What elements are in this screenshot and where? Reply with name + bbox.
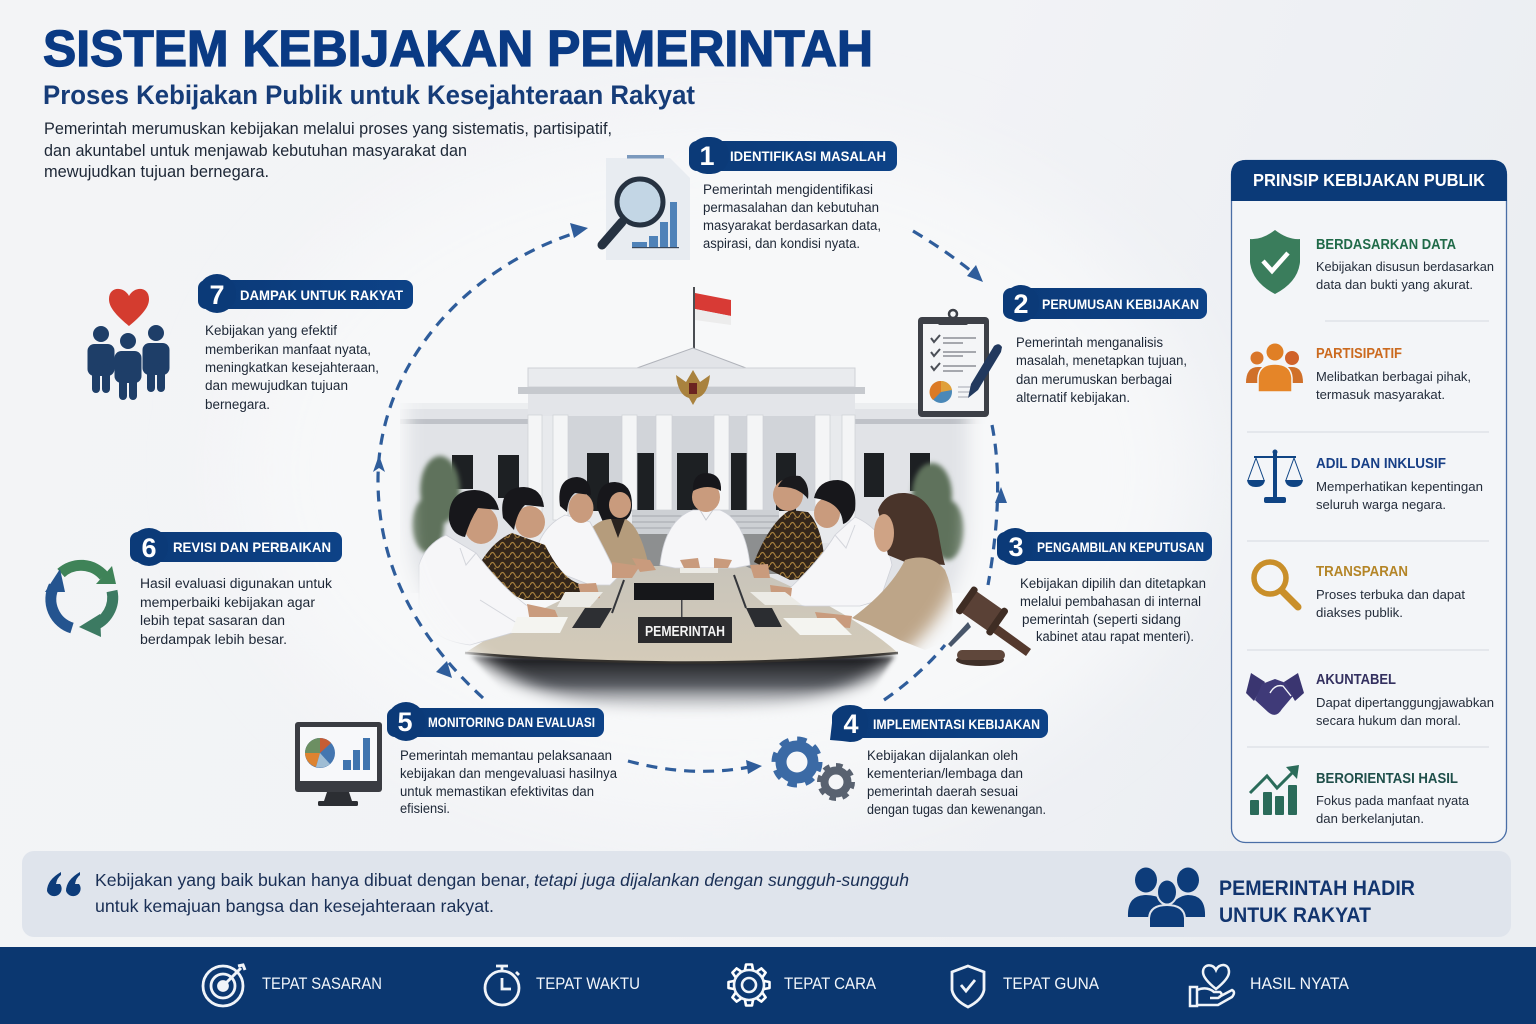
badge: step 3 <box>997 528 1212 565</box>
footer item: tepat guna: TEPAT GUNA <box>1003 974 1100 993</box>
name plate <box>638 617 732 643</box>
emblem: garuda <box>676 370 710 405</box>
badge: step 4: 4 <box>843 709 859 739</box>
person: man centre <box>660 473 750 568</box>
text: step 2: Pemerintah menganalisis <box>1016 335 1163 350</box>
arrow: 4 to 3 <box>884 645 945 700</box>
icon: government people <box>1128 868 1205 928</box>
principle: transparan <box>1254 562 1465 620</box>
quote band <box>22 851 1511 937</box>
arrow: 5 to 4 <box>628 760 762 774</box>
text: step 1: aspirasi, dan kondisi nyata. <box>703 236 860 251</box>
slogan <box>1219 877 1415 927</box>
icon: gear <box>728 964 770 1006</box>
badge: step 3: PENGAMBILAN KEPUTUSAN <box>1037 539 1204 555</box>
icon: handshake <box>1246 673 1304 715</box>
icon: orange people <box>1246 344 1303 392</box>
text: step 7: meningkatkan kesejahteraan, <box>205 360 379 375</box>
principle: berdasarkan data: BERDASARKAN DATA <box>1316 237 1456 253</box>
icon: people with heart <box>88 289 170 400</box>
icon: clipboard with pen <box>918 310 1002 417</box>
icon: shield check <box>952 966 984 1007</box>
icon: target <box>203 965 245 1006</box>
principle: partisipatif: PARTISIPATIF <box>1316 346 1402 362</box>
intro text: dan akuntabel untuk menjawab kebutuhan masyarakat dan <box>44 142 467 160</box>
badge: step 2: 2 <box>1013 289 1029 319</box>
text: step 5: untuk memastikan efektivitas dan <box>400 784 594 799</box>
principle: berorientasi hasil <box>1250 765 1470 826</box>
text: step 1: permasalahan dan kebutuhan <box>703 200 879 215</box>
text: step 5: efisiensi. <box>400 801 450 816</box>
people <box>419 473 953 650</box>
text: step 1: masyarakat berdasarkan data, <box>703 218 881 233</box>
text: step 4: kementerian/lembaga dan <box>867 766 1023 781</box>
slogan: UNTUK RAKYAT <box>1219 904 1371 927</box>
icon: stopwatch <box>485 966 519 1005</box>
principle: berorientasi hasil: dan berkelanjutan. <box>1316 811 1424 826</box>
text: step 2: masalah, menetapkan tujuan, <box>1016 353 1187 368</box>
intro text: Pemerintah merumuskan kebijakan melalui proses yang sistematis, partisipatif, <box>44 120 612 138</box>
badge: step 1: IDENTIFIKASI MASALAH <box>730 148 886 164</box>
text: step 6: berdampak lebih besar. <box>140 632 287 647</box>
table <box>465 566 898 721</box>
text: step 1: Pemerintah mengidentifikasi <box>703 182 873 197</box>
footer item: tepat guna <box>952 966 1100 1007</box>
slogan: PEMERINTAH HADIR <box>1219 877 1415 900</box>
principle: akuntabel: AKUNTABEL <box>1316 672 1396 688</box>
icon: document with magnifier <box>602 155 690 260</box>
text: step 6: lebih tepat sasaran dan <box>140 613 285 628</box>
badge: step 1: 1 <box>699 141 715 171</box>
icon: quotation mark <box>47 872 81 896</box>
text: step 7: bernegara. <box>205 397 270 412</box>
quote text: untuk kemajuan bangsa dan kesejahteraan rakyat. <box>95 896 494 916</box>
icon: gears <box>774 740 852 798</box>
arrow: 3 to 2 <box>988 425 1007 585</box>
laptops and papers <box>511 568 852 635</box>
text: step 2 <box>1016 335 1187 405</box>
icon: growth chart <box>1250 765 1299 815</box>
principle: akuntabel <box>1246 672 1494 728</box>
principle: akuntabel: secara hukum dan moral. <box>1316 713 1461 728</box>
badge: step 1 <box>689 137 897 174</box>
badge: step 5: MONITORING DAN EVALUASI <box>428 714 595 730</box>
principle: akuntabel: Dapat dipertanggungjawabkan <box>1316 695 1494 710</box>
intro text <box>44 120 612 181</box>
text: step 4: Kebijakan dijalankan oleh <box>867 748 1018 763</box>
step 4 <box>774 705 1048 817</box>
text: step 2: alternatif kebijakan. <box>1016 390 1130 405</box>
principle: adil dan inklusif: Memperhatikan kepentingan <box>1316 479 1483 494</box>
text: step 2: dan merumuskan berbagai <box>1016 372 1172 387</box>
person: batik man left <box>482 487 600 605</box>
step 3 <box>948 528 1212 666</box>
step 5 <box>295 702 617 816</box>
palace building <box>400 348 990 593</box>
name plate: PEMERINTAH <box>645 624 725 640</box>
principle: berdasarkan data <box>1250 230 1494 294</box>
icon: scales <box>1247 450 1303 503</box>
quote text: Kebijakan yang baik bukan hanya dibuat dengan benar, <box>95 870 530 890</box>
subtitle: Proses Kebijakan Publik untuk Kesejahteraan Rakyat <box>43 80 695 110</box>
badge: step 7: 7 <box>209 280 225 310</box>
principle: partisipatif <box>1246 344 1471 402</box>
badge: step 6: 6 <box>141 533 157 563</box>
text: step 7: Kebijakan yang efektif <box>205 323 337 338</box>
principle: partisipatif: termasuk masyarakat. <box>1316 387 1445 402</box>
principle: transparan: Proses terbuka dan dapat <box>1316 587 1465 602</box>
text: step 4: dengan tugas dan kewenangan. <box>867 802 1046 817</box>
flag <box>693 287 731 351</box>
panel heading <box>1231 160 1507 201</box>
footer item: hasil nyata <box>1190 965 1350 1006</box>
person: batik man right <box>750 476 825 580</box>
icon: gavel <box>948 585 1031 666</box>
footer item: tepat waktu <box>485 966 640 1005</box>
text: step 7: dan mewujudkan tujuan <box>205 378 348 393</box>
badge: step 7: DAMPAK UNTUK RAKYAT <box>240 287 403 303</box>
text: step 3: pemerintah (seperti sidang <box>1022 612 1181 627</box>
person: man front left <box>419 490 560 645</box>
principle: adil dan inklusif: ADIL DAN INKLUSIF <box>1316 456 1446 472</box>
principle: partisipatif: Melibatkan berbagai pihak, <box>1316 369 1471 384</box>
text: step 5: Pemerintah memantau pelaksanaan <box>400 748 612 763</box>
principle: adil dan inklusif <box>1247 450 1483 512</box>
panel heading: PRINSIP KEBIJAKAN PUBLIK <box>1253 170 1485 190</box>
principle: berorientasi hasil: Fokus pada manfaat nyata <box>1316 793 1470 808</box>
arrow: 6 ring back to 1 <box>373 223 588 698</box>
badge: step 5 <box>387 702 604 741</box>
text: step 5 <box>400 748 617 816</box>
icon: heart in hand <box>1190 965 1234 1006</box>
text: step 6: Hasil evaluasi digunakan untuk <box>140 576 332 591</box>
icon: golden magnifier <box>1254 562 1298 607</box>
footer item: tepat cara <box>728 964 877 1006</box>
intro text: mewujudkan tujuan bernegara. <box>44 163 269 181</box>
text: step 6: memperbaiki kebijakan agar <box>140 595 316 610</box>
footer item: tepat waktu: TEPAT WAKTU <box>536 974 640 993</box>
text: step 3: Kebijakan dipilih dan ditetapkan <box>1020 576 1206 591</box>
title: SISTEM KEBIJAKAN PEMERINTAH <box>43 20 873 77</box>
principle: transparan: diakses publik. <box>1316 605 1403 620</box>
step 7 <box>88 274 413 412</box>
trees <box>412 456 964 560</box>
step 1 <box>602 137 897 260</box>
footer bar <box>0 947 1536 1024</box>
step 6 <box>45 528 342 647</box>
footer item: hasil nyata: HASIL NYATA <box>1250 974 1350 993</box>
icon: cycle arrows <box>45 565 116 637</box>
icon: monitor with charts <box>295 722 382 806</box>
arrow: 1 to 2 <box>913 231 983 282</box>
step 2 <box>918 285 1207 417</box>
panel: prinsip kebijakan publik <box>1231 160 1507 842</box>
text: step 4: pemerintah daerah sesuai <box>867 784 1018 799</box>
principle: berorientasi hasil: BERORIENTASI HASIL <box>1316 771 1458 787</box>
footer item: tepat cara: TEPAT CARA <box>784 974 877 993</box>
badge: step 7 <box>198 274 413 313</box>
text: step 3: kabinet atau rapat menteri). <box>1036 629 1194 644</box>
badge: step 4: IMPLEMENTASI KEBIJAKAN <box>873 716 1040 732</box>
badge: step 6 <box>130 528 342 566</box>
central photo: government meeting in front of the palace <box>400 287 990 721</box>
badge: step 4 <box>830 705 1048 742</box>
badge: step 5: 5 <box>397 707 413 737</box>
text: step 1 <box>703 182 881 251</box>
text: step 3 <box>1020 576 1206 644</box>
person: woman front right <box>815 493 953 650</box>
principle: berdasarkan data: Kebijakan disusun berdasarkan <box>1316 259 1494 274</box>
badge: step 2 <box>1003 285 1207 322</box>
quote text: tetapi juga dijalankan dengan sungguh-sungguh <box>534 870 909 890</box>
badge: step 3: 3 <box>1008 532 1024 562</box>
text: step 7: memberikan manfaat nyata, <box>205 342 371 357</box>
badge: step 2: PERUMUSAN KEBIJAKAN <box>1042 296 1199 312</box>
person: man front right <box>770 480 892 606</box>
text: step 6 <box>140 576 332 647</box>
icon: shield <box>1250 230 1300 294</box>
footer item: tepat sasaran <box>203 965 382 1006</box>
person: woman back left <box>587 482 656 572</box>
principle: transparan: TRANSPARAN <box>1316 564 1408 580</box>
text: step 4 <box>867 748 1046 817</box>
text: step 5: kebijakan dan mengevaluasi hasilnya <box>400 766 617 781</box>
text: step 7 <box>205 323 379 412</box>
principle: berdasarkan data: data dan bukti yang akurat. <box>1316 277 1473 292</box>
text: step 3: melalui pembahasan di internal <box>1020 594 1201 609</box>
footer item: tepat sasaran: TEPAT SASARAN <box>262 974 382 993</box>
person: man back left <box>538 477 640 585</box>
principle: adil dan inklusif: seluruh warga negara. <box>1316 497 1446 512</box>
badge: step 6: REVISI DAN PERBAIKAN <box>173 539 331 555</box>
quote text <box>95 870 909 916</box>
